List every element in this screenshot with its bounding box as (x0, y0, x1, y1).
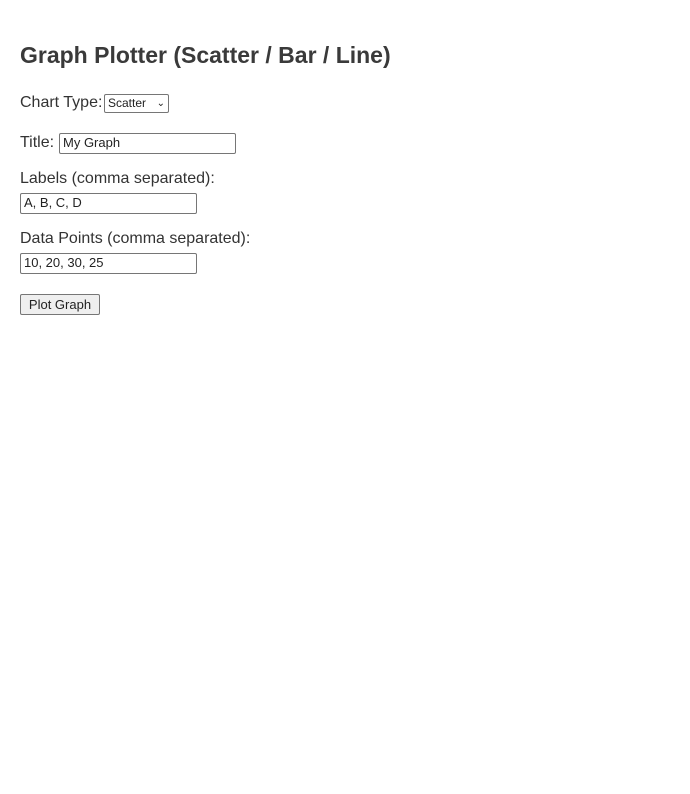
field: data points (20, 230, 250, 274)
title input: My Graph (63, 135, 120, 150)
select: Scatter (108, 96, 146, 110)
button: plot graph (20, 294, 100, 315)
data input (20, 253, 197, 274)
select (104, 94, 169, 113)
field: title (20, 133, 236, 154)
field: labels (20, 170, 215, 214)
field: chart type: Chart Type: (20, 94, 102, 111)
labels input (20, 193, 197, 214)
field: labels: Labels (comma separated): (20, 170, 215, 187)
button: plot graph: Plot Graph (29, 297, 91, 312)
labels input: A, B, C, D (24, 195, 82, 210)
data input: 10, 20, 30, 25 (24, 255, 104, 270)
title input (59, 133, 236, 154)
field: title: Title: (20, 134, 54, 151)
title: Graph Plotter (Scatter / Bar / Line) (20, 42, 391, 68)
select: ⌄ (157, 98, 165, 109)
field: data points: Data Points (comma separated): (20, 230, 250, 247)
field: chart type (20, 94, 169, 113)
